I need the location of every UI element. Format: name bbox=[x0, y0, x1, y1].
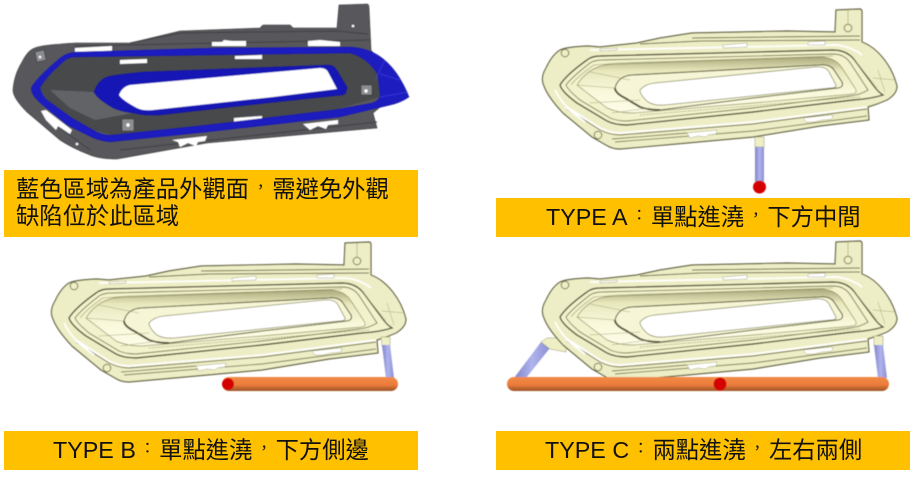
blue outer ring bbox=[31, 47, 409, 142]
banner: blue area note bbox=[4, 170, 418, 237]
text: TYPE B: TYPE B 單點進澆 下方側邊 bbox=[53, 437, 369, 463]
right gate bbox=[874, 336, 883, 346]
injection point bbox=[753, 180, 766, 194]
banner: TYPE C bbox=[496, 431, 910, 470]
dark part body bbox=[13, 4, 400, 159]
runner bbox=[507, 377, 889, 391]
image: TYPE B part with runner bbox=[51, 242, 406, 391]
text: blue area note bbox=[16, 176, 389, 229]
runner bbox=[222, 377, 398, 391]
banner: TYPE B bbox=[4, 431, 418, 470]
blue inner ring bbox=[94, 65, 347, 115]
image: TYPE A part with gate bbox=[542, 9, 897, 194]
icon: clip cutouts bbox=[41, 40, 340, 147]
text: TYPE C: TYPE C 兩點進澆 左右兩側 bbox=[545, 437, 862, 463]
injection point bbox=[222, 378, 234, 390]
gate stem bbox=[381, 337, 390, 346]
image: TYPE C part with runner bbox=[507, 241, 897, 391]
text: blue area note: 藍色區域為產品外觀面 需避免外觀 bbox=[16, 176, 389, 202]
gate stem bbox=[755, 137, 764, 147]
text: TYPE A: TYPE A 單點進澆 下方中間 bbox=[546, 204, 861, 230]
banner: TYPE A bbox=[496, 198, 910, 237]
image: dark part with blue appearance surface bbox=[13, 4, 409, 159]
icon: mounting bosses bbox=[35, 50, 372, 131]
injection point bbox=[714, 378, 726, 390]
text: blue area note: 缺陷位於此區域 bbox=[16, 203, 179, 229]
left gate bbox=[514, 342, 550, 378]
